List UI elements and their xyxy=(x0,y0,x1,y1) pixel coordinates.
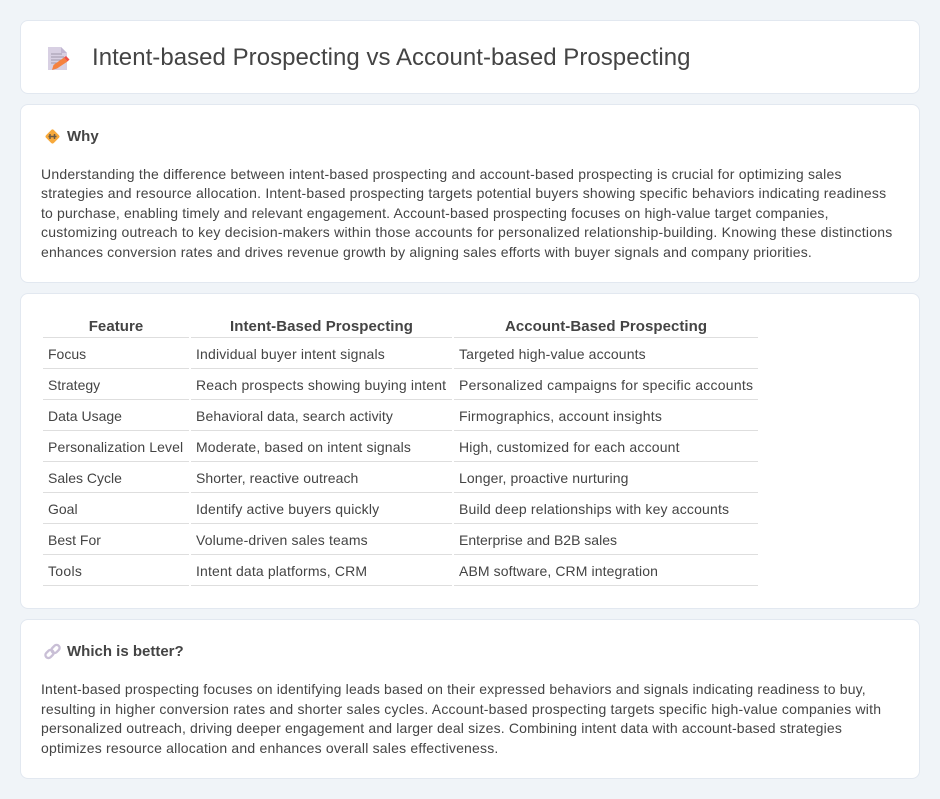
comparison table: Firmographics, account insights xyxy=(459,408,662,424)
comparison table: Enterprise and B2B sales xyxy=(459,532,617,548)
comparison table: Longer, proactive nurturing xyxy=(459,470,629,486)
icon: document with pencil xyxy=(48,47,70,70)
panel: comparison table xyxy=(20,293,920,609)
why heading: Why xyxy=(67,128,99,145)
comparison table: Best For xyxy=(48,532,101,548)
which is better text block: Intent-based prospecting focuses on identifying leads based on their expressed behaviors and signals indicating readiness to buy, xyxy=(41,681,866,697)
comparison table: Build deep relationships with key accounts xyxy=(459,501,729,517)
comparison table: Intent data platforms, CRM xyxy=(196,563,367,579)
comparison table: Intent-Based Prospecting xyxy=(230,318,413,335)
why text block: customizing outreach to key decision-makers within those accounts for personalized relationship-building. Knowing these distinctions xyxy=(41,224,892,240)
which is better text block xyxy=(41,681,881,756)
comparison table: Sales Cycle xyxy=(48,470,122,486)
comparison table: High, customized for each account xyxy=(459,439,680,455)
panel: why xyxy=(20,104,920,283)
title heading: Intent-based Prospecting vs Account-based Prospecting xyxy=(92,44,690,71)
comparison table: Strategy xyxy=(48,377,100,393)
comparison table: Data Usage xyxy=(48,408,122,424)
which is better text block: optimizes resource allocation and enhances overall sales effectiveness. xyxy=(41,740,499,756)
comparison table: Moderate, based on intent signals xyxy=(196,439,411,455)
comparison table: Feature xyxy=(89,318,143,335)
comparison table: Goal xyxy=(48,501,78,517)
why text block: to purchase, enabling timely and relevant engagement. Account-based prospecting focuses on high-value target companies, xyxy=(41,205,829,221)
comparison table: Account-Based Prospecting xyxy=(505,318,707,335)
comparison table: Personalized campaigns for specific accounts xyxy=(459,377,753,393)
which is better text block: resulting in higher conversion rates and shorter sales cycles. Account-based prospecting targets specific high-value companies with xyxy=(41,701,881,717)
comparison table: Volume-driven sales teams xyxy=(196,532,368,548)
comparison table: Shorter, reactive outreach xyxy=(196,470,358,486)
panel: which is better xyxy=(20,619,920,779)
why text block: strategies and resource allocation. Intent-based prospecting targets potential buyers showing specific behaviors indicating readiness xyxy=(41,185,886,201)
why text block xyxy=(41,166,892,260)
icon: chain link xyxy=(44,644,61,660)
comparison table: Reach prospects showing buying intent xyxy=(196,377,446,393)
comparison table: Behavioral data, search activity xyxy=(196,408,393,424)
icon: warning diamond xyxy=(46,129,60,144)
comparison table: Individual buyer intent signals xyxy=(196,346,385,362)
comparison table xyxy=(43,318,758,586)
comparison table: ABM software, CRM integration xyxy=(459,563,658,579)
why text block: enhances conversion rates and drives revenue growth by aligning sales efforts with buyer signals and company priorities. xyxy=(41,244,812,260)
which is better heading: Which is better? xyxy=(67,643,184,660)
comparison table: Identify active buyers quickly xyxy=(196,501,379,517)
which is better text block: personalized outreach, driving deeper engagement and larger deal sizes. Combining intent data with account-based strategies xyxy=(41,720,842,736)
why text block: Understanding the difference between intent-based prospecting and account-based prospecting is crucial for optimizing sales xyxy=(41,166,842,182)
comparison table: Personalization Level xyxy=(48,439,183,455)
comparison table: Focus xyxy=(48,346,86,362)
comparison table: Tools xyxy=(48,563,82,579)
comparison table: Targeted high-value accounts xyxy=(459,346,646,362)
panel: title xyxy=(20,20,920,94)
